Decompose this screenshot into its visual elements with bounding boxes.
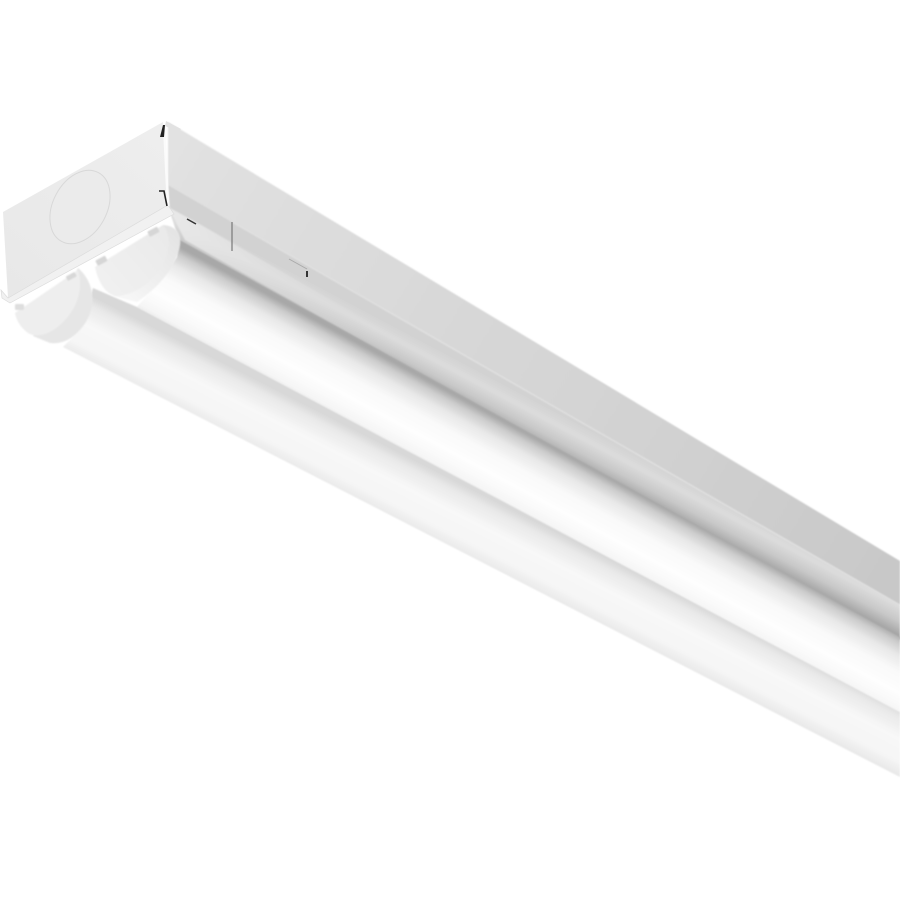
corner seam and black gaps [159,121,196,224]
lower end cap [15,268,93,343]
fixture body: side panel [168,122,900,640]
end plate with knockout [1,122,174,303]
upper diffuser tube [137,238,900,712]
upper end cap [95,225,180,302]
lower diffuser tube [63,288,900,777]
slot marks on side panel [232,222,307,277]
mounting lip [1,205,174,303]
knockout circle [38,160,122,254]
